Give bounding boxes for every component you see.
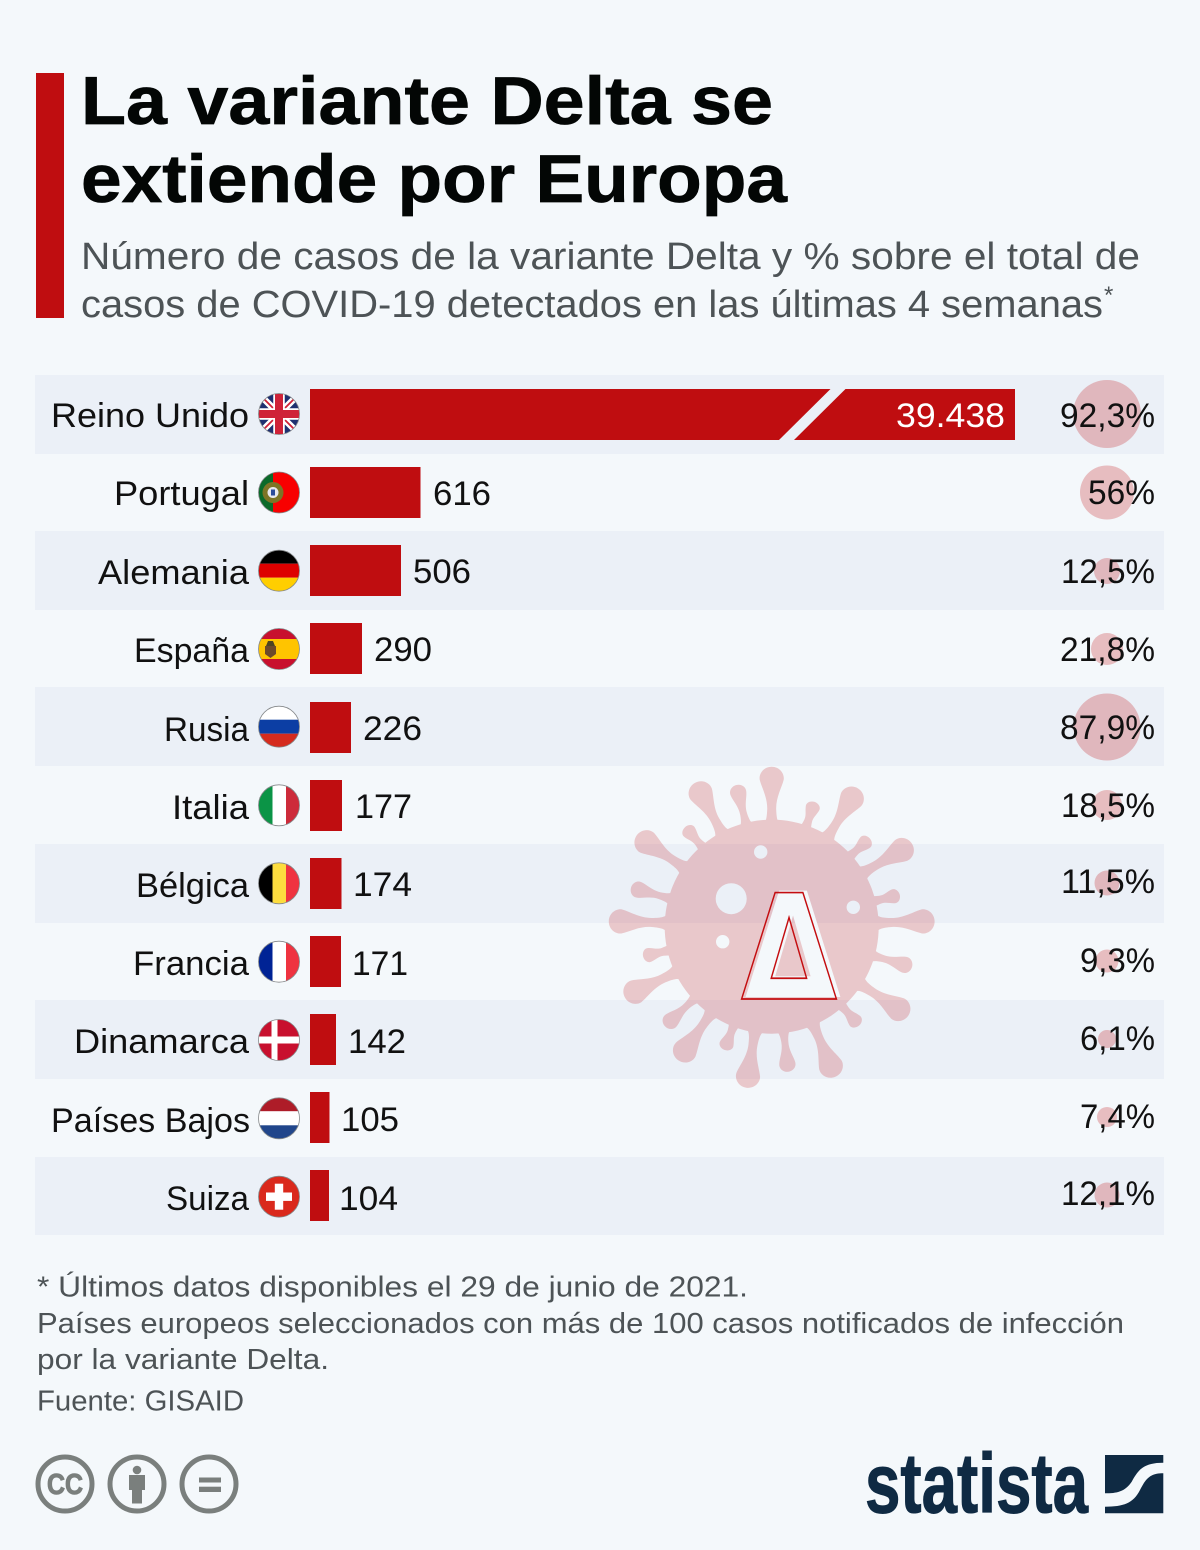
icon: flag Belgium: [258, 862, 300, 904]
icon: creative commons: CC: [47, 1469, 83, 1501]
icon: virus with delta symbol: [608, 767, 935, 1090]
value: 174: 174: [353, 866, 412, 904]
bar: 290: [310, 623, 362, 674]
row: Francia: [133, 936, 1155, 987]
icon: flag France: [258, 941, 300, 983]
share: 56%: [1080, 466, 1155, 520]
bar: 142: [310, 1014, 336, 1065]
bar: 177: [310, 780, 342, 831]
value: 105: 105: [341, 1101, 399, 1139]
icon: flag Netherlands: [258, 1097, 300, 1139]
footnote: por la variante Delta.: [37, 1344, 329, 1376]
bar: 616: [310, 467, 420, 518]
share: 7,4%: 7,4%: [1080, 1098, 1155, 1136]
footnote: Países europeos seleccionados con más de 100 casos notificados de infección: [37, 1308, 1124, 1340]
icon: flag Germany: [258, 550, 300, 592]
bar: 105: [310, 1092, 330, 1143]
share: 87,9%: [1060, 694, 1155, 760]
share: 18,5%: 18,5%: [1061, 787, 1155, 825]
row: España: [134, 623, 1155, 674]
share: 87,9%: 87,9%: [1060, 709, 1155, 747]
row: Dinamarca: [35, 1000, 1164, 1079]
icon: flag Denmark: [258, 1019, 300, 1061]
row: Suiza: [35, 1157, 1164, 1235]
label: Suiza: Suiza: [166, 1180, 250, 1218]
share: 11,5%: 11,5%: [1061, 863, 1155, 901]
icon: creative commons: [38, 1457, 92, 1511]
value: 39.438: 39.438: [896, 397, 1005, 435]
row: Rusia: [35, 687, 1164, 766]
label: Rusia: Rusia: [164, 711, 250, 749]
icon: virus with delta symbol: Δ: [745, 862, 841, 1032]
label: Francia: Francia: [133, 945, 250, 983]
row: Países Bajos: [51, 1092, 1155, 1143]
subtitle: casos de COVID-19 detectados en las últimas 4 semanas: [81, 284, 1103, 326]
subtitle: Número de casos de la variante Delta y % sobre el total de: [81, 236, 1140, 278]
logo: statista: statista: [865, 1436, 1089, 1530]
bar: 39.438: [310, 389, 1015, 440]
share: 92,3%: [1060, 380, 1155, 448]
label: Dinamarca: Dinamarca: [74, 1023, 250, 1061]
row: Alemania: [35, 531, 1164, 610]
share: 6,1%: 6,1%: [1080, 1020, 1155, 1058]
footnote: [37, 1272, 1124, 1376]
row: Bélgica: [35, 844, 1164, 923]
icon: virus with delta symbol: Δ: [741, 864, 837, 1034]
value: 171: 171: [352, 945, 408, 983]
icon: flag Italy: [258, 784, 300, 826]
value: 506: 506: [413, 553, 471, 591]
row: Portugal: [114, 466, 1155, 520]
title: [81, 63, 788, 217]
row: Reino Unido: [35, 375, 1164, 454]
label: Alemania: Alemania: [98, 554, 250, 592]
icon: flag Switzerland: [258, 1176, 300, 1218]
share: 9,3%: 9,3%: [1080, 942, 1155, 980]
bar: 226: [310, 702, 351, 753]
label: Portugal: Portugal: [114, 475, 249, 513]
subtitle: *: [1104, 282, 1113, 309]
share: 21,8%: 21,8%: [1060, 631, 1155, 669]
subtitle: [81, 236, 1140, 326]
bar: 171: [310, 936, 341, 987]
source: Fuente: GISAID: [37, 1386, 244, 1418]
icon: flag Portugal: [258, 472, 300, 514]
footnote: * Últimos datos disponibles el 29 de junio de 2021.: [37, 1272, 748, 1304]
label: Italia: Italia: [172, 789, 250, 827]
title: La variante Delta se: [81, 63, 773, 139]
title accent bar: [36, 73, 64, 318]
label: España: España: [134, 632, 250, 670]
label: Bélgica: Bélgica: [136, 867, 250, 905]
label: Países Bajos: Países Bajos: [51, 1102, 250, 1140]
icon: flag Russia: [258, 706, 300, 748]
icon: flag Spain: [258, 628, 300, 670]
value: 616: 616: [433, 475, 491, 513]
label: Reino Unido: Reino Unido: [51, 397, 249, 435]
value: 226: 226: [363, 710, 422, 748]
share: 12,5%: 12,5%: [1061, 553, 1155, 591]
row: Italia: [172, 780, 1155, 831]
icon: no derivatives: [182, 1457, 236, 1511]
bar: 104: [310, 1170, 329, 1221]
value: 104: 104: [339, 1180, 398, 1218]
bar: 174: [310, 858, 342, 909]
value: 177: 177: [355, 788, 412, 826]
share: 12,1%: 12,1%: [1061, 1175, 1155, 1213]
value: 290: 290: [374, 631, 432, 669]
share: 56%: 56%: [1088, 474, 1155, 512]
icon: attribution: [110, 1457, 164, 1511]
icon: flag United Kingdom: [258, 393, 300, 435]
share: 92,3%: 92,3%: [1060, 397, 1155, 435]
value: 142: 142: [348, 1023, 406, 1061]
title: extiende por Europa: [81, 141, 788, 217]
bar: 506: [310, 545, 401, 596]
